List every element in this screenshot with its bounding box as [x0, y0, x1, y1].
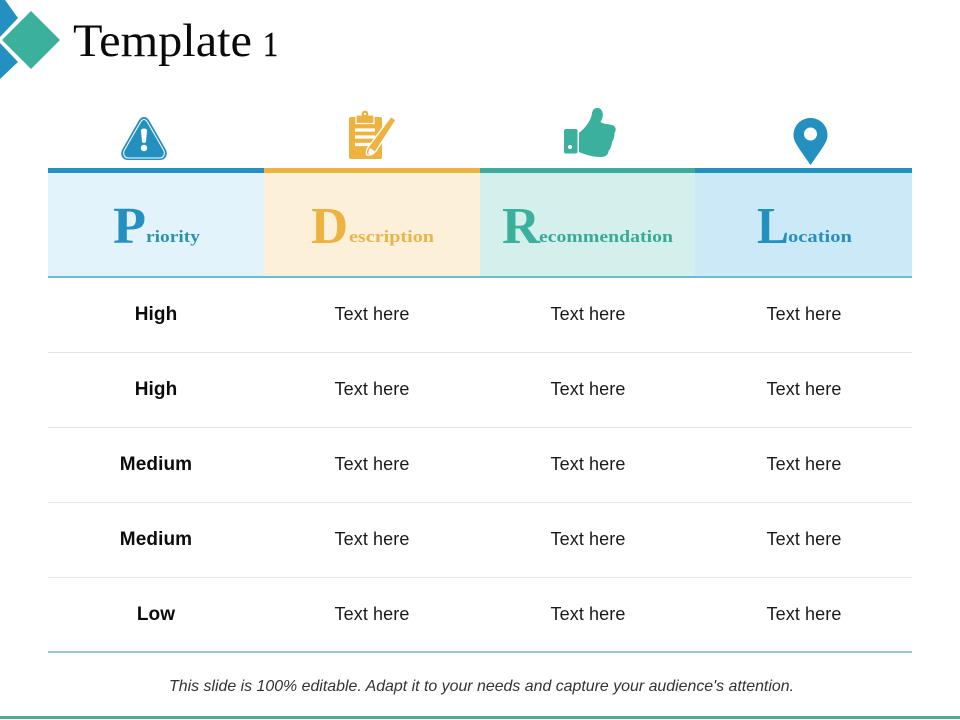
table row 2 — [135, 379, 841, 400]
bottom bar — [0, 716, 960, 719]
table row 4: Text here — [767, 529, 841, 549]
table row 4: Text here — [551, 529, 625, 549]
table row 1 — [135, 304, 841, 325]
table row 1: Text here — [767, 304, 841, 324]
header: Recommendation: R — [502, 198, 541, 255]
table row 5: Text here — [551, 604, 625, 624]
table row 4 — [120, 529, 841, 550]
icon: clipboard with pencil — [349, 110, 395, 159]
title: 1 — [263, 25, 278, 64]
table row 5: Low — [137, 604, 175, 625]
table row 2: High — [135, 379, 177, 400]
table row 4: Medium — [120, 529, 192, 550]
header: Recommendation: ecommendation — [539, 227, 674, 246]
table row 1: Text here — [551, 304, 625, 324]
logo: diamonds — [0, 0, 60, 79]
table row 2: Text here — [335, 379, 409, 399]
header: Location — [695, 168, 912, 277]
table row 3: Text here — [335, 454, 409, 474]
header: Description: escription — [349, 227, 435, 246]
header: Description: D — [311, 198, 348, 255]
table row 4: Text here — [335, 529, 409, 549]
table row 2: Text here — [767, 379, 841, 399]
header: Location: L — [757, 198, 789, 255]
table row 1: High — [135, 304, 177, 325]
title: Template — [73, 15, 252, 67]
icon: warning triangle — [121, 117, 167, 160]
icon: thumbs up — [564, 108, 616, 157]
table row 2: Text here — [551, 379, 625, 399]
table row 3: Medium — [120, 454, 192, 475]
table row 3 — [120, 454, 841, 475]
table row 1: Text here — [335, 304, 409, 324]
footer note: This slide is 100% editable. Adapt it to your needs and capture your audience's attention. — [169, 678, 794, 695]
table row 3: Text here — [551, 454, 625, 474]
header: Recommendation — [480, 168, 695, 277]
icon: location pin — [794, 118, 828, 165]
table row 5 — [137, 604, 841, 625]
header: Priority: riority — [146, 227, 201, 246]
header: Location: ocation — [788, 227, 853, 246]
table row 3: Text here — [767, 454, 841, 474]
table row 5: Text here — [767, 604, 841, 624]
table row 5: Text here — [335, 604, 409, 624]
header: Priority: P — [113, 198, 146, 255]
header: Priority — [48, 168, 264, 277]
header: Description — [264, 168, 480, 277]
